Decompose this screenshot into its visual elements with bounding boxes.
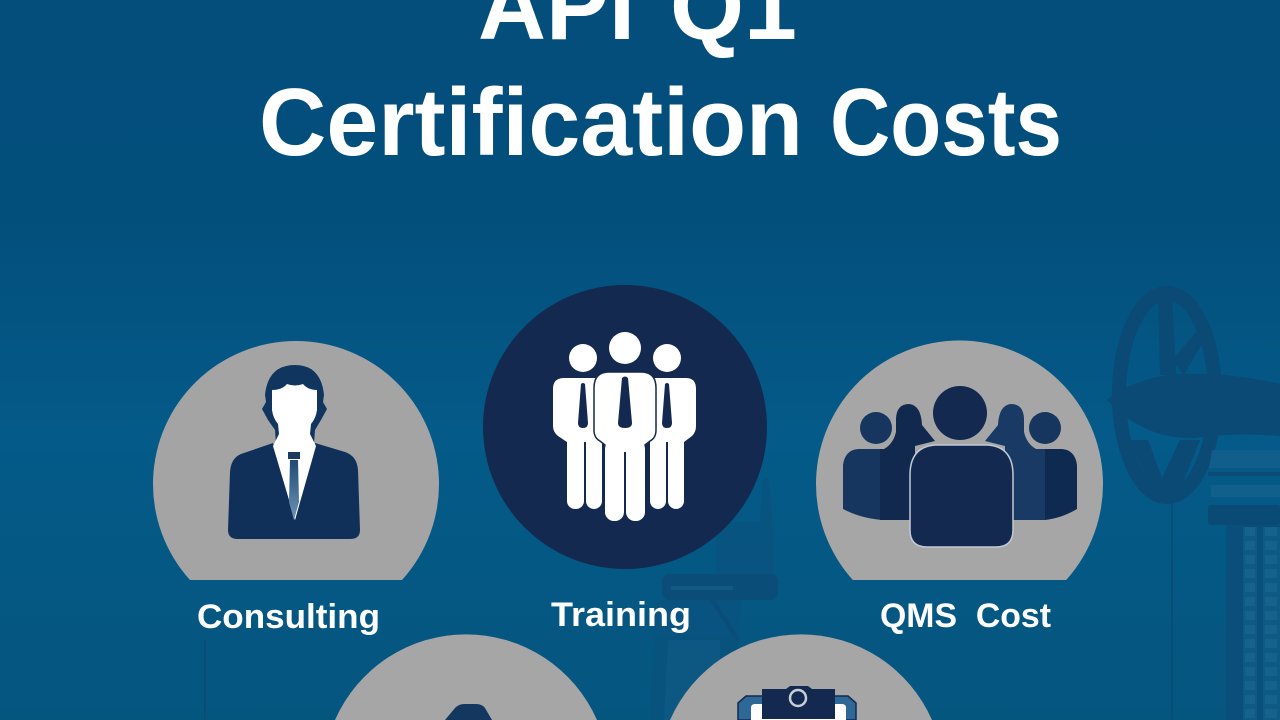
QMS label: QMS Cost [880, 597, 1051, 635]
consulting label: Consulting [197, 598, 380, 636]
training badge [483, 285, 767, 569]
training label: Training [551, 596, 691, 634]
background: derrick right [1208, 450, 1280, 720]
background: thin vertical line left [204, 640, 206, 720]
consulting badge [153, 341, 439, 580]
icon: clipboard [738, 686, 856, 720]
background: derrick centre [650, 478, 778, 720]
panel: bottom left [335, 634, 597, 720]
QMS badge [816, 341, 1103, 580]
panel: consulting [153, 341, 439, 636]
icon: consultant [228, 365, 360, 539]
panel: QMS cost [816, 341, 1103, 635]
title: Certification [259, 69, 803, 176]
background: pumpjack silhouette [1107, 292, 1280, 720]
panel: bottom right [670, 634, 932, 720]
icon: bottom left figure [445, 704, 492, 720]
panel: training [483, 285, 767, 634]
icon: group of people [843, 386, 1077, 547]
bottom left badge [335, 634, 597, 720]
icon: team of three [553, 332, 696, 521]
title [259, 0, 1062, 176]
bottom right badge [670, 634, 932, 720]
title: Costs [830, 69, 1062, 176]
